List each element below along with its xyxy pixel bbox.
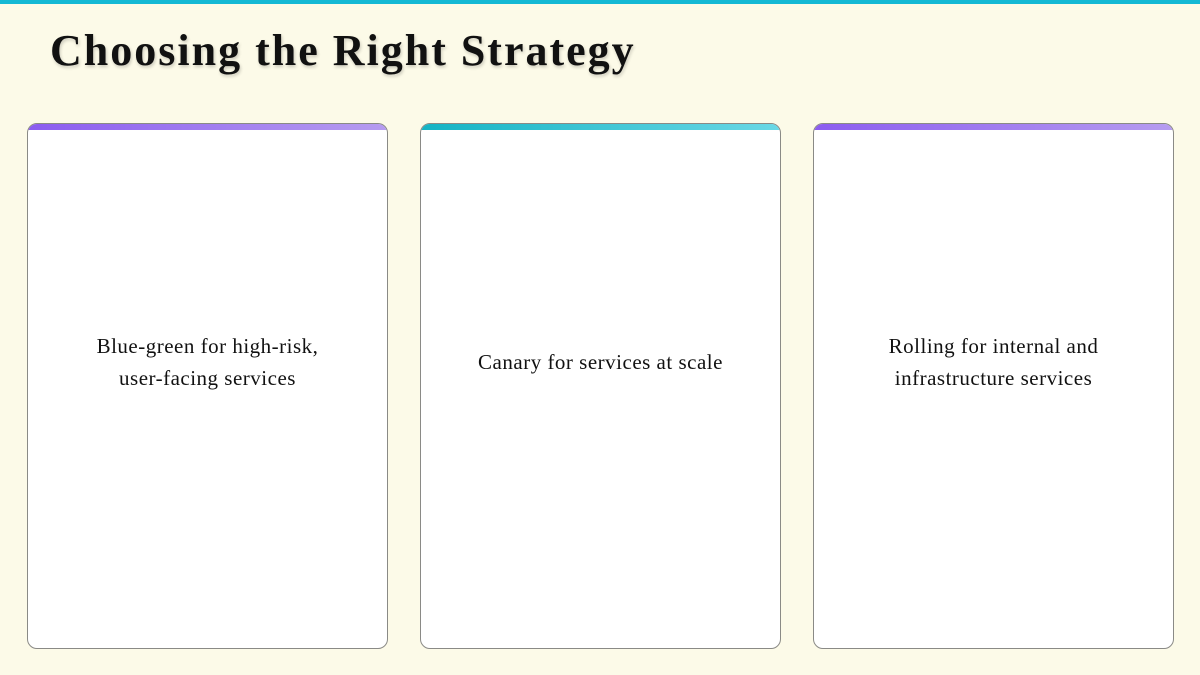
text: rolling: Rolling for internal and xyxy=(889,334,1098,358)
text: rolling: infrastructure services xyxy=(895,366,1092,390)
panel: canary xyxy=(420,123,781,649)
text: blue-green: user-facing services xyxy=(119,366,296,390)
text: blue-green: Blue-green for high-risk, xyxy=(97,334,318,358)
panel: blue-green xyxy=(27,123,388,649)
text: blue-green xyxy=(97,334,318,390)
panel: rolling xyxy=(813,123,1174,649)
text: canary: Canary for services at scale xyxy=(478,350,723,374)
title: Choosing the Right Strategy xyxy=(50,26,636,75)
text: rolling xyxy=(889,334,1098,390)
